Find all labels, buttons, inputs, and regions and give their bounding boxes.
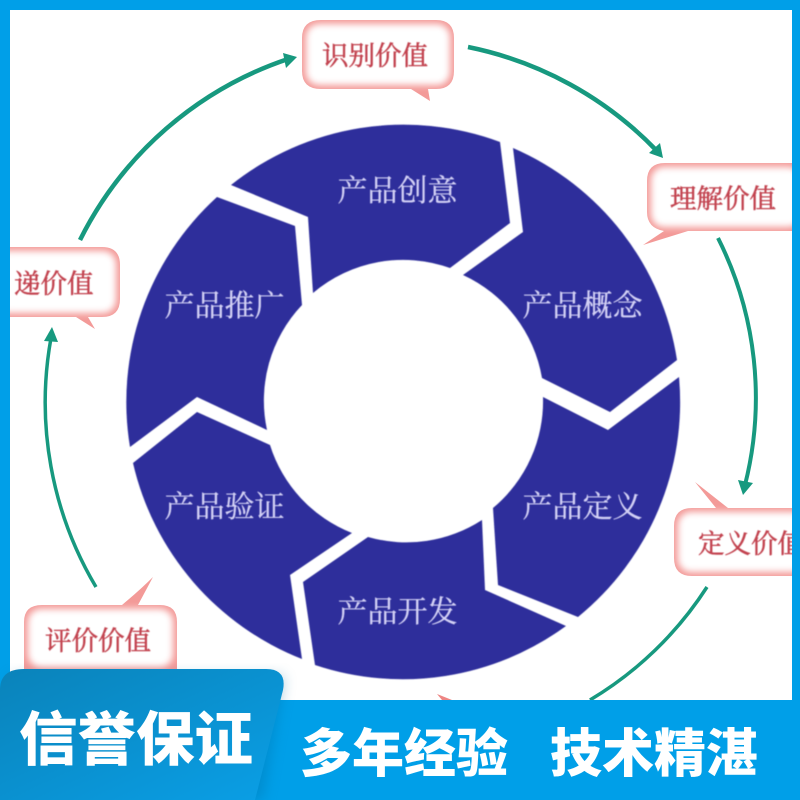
label: 产品定义: 产品定义 <box>522 491 642 524</box>
callout: 传递价值 <box>0 247 120 329</box>
tab shadow <box>10 676 284 800</box>
callout: 评价价值: 评价价值 <box>45 626 151 656</box>
slogan: 多年经验: 多年经验 <box>300 726 508 784</box>
label: 产品验证: 产品验证 <box>164 491 284 524</box>
segment: 产品定义 <box>493 377 680 617</box>
callout: 理解价值 <box>643 163 800 245</box>
callout: 评价价值 <box>24 577 177 670</box>
label: 产品推广: 产品推广 <box>164 290 284 323</box>
ring of six product stages <box>126 125 680 679</box>
callout: 识别价值: 识别价值 <box>322 41 428 71</box>
arrow: 识别价值 to 理解价值 <box>468 47 663 158</box>
segment: 产品创意 <box>231 125 510 293</box>
label: 产品创意: 产品创意 <box>338 175 458 208</box>
frame: right border <box>792 0 800 800</box>
heading: 信誉保证: 信誉保证 <box>19 708 253 773</box>
arrow: 定义价值 downward <box>590 587 707 700</box>
callout: 传递价值: 递价值 <box>14 269 94 299</box>
ring labels <box>164 175 643 629</box>
bottom banner <box>0 669 800 800</box>
callout: 理解价值: 理解价值 <box>670 184 776 214</box>
callout tail: bottom callout <box>437 694 452 700</box>
arrow: 传递价值 to 识别价值 <box>80 53 297 240</box>
segment: 产品验证 <box>133 412 352 659</box>
frame: top border <box>0 0 800 10</box>
segment: 产品开发 <box>303 520 566 679</box>
segment: 产品概念 <box>463 148 677 412</box>
frame: left border <box>0 0 10 800</box>
arrow: 理解价值 to 定义价值 <box>718 238 756 495</box>
label: 产品开发: 产品开发 <box>338 596 458 629</box>
slogan: 技术精湛: 技术精湛 <box>550 726 758 784</box>
label: 产品概念: 产品概念 <box>522 290 643 323</box>
tab: 信誉保证 background <box>0 669 284 800</box>
segment: 产品推广 <box>126 197 302 447</box>
callout: 识别价值 <box>302 20 454 101</box>
arrow: 评价价值 to 传递价值 <box>44 327 96 587</box>
callout: 定义价值 <box>674 482 800 576</box>
